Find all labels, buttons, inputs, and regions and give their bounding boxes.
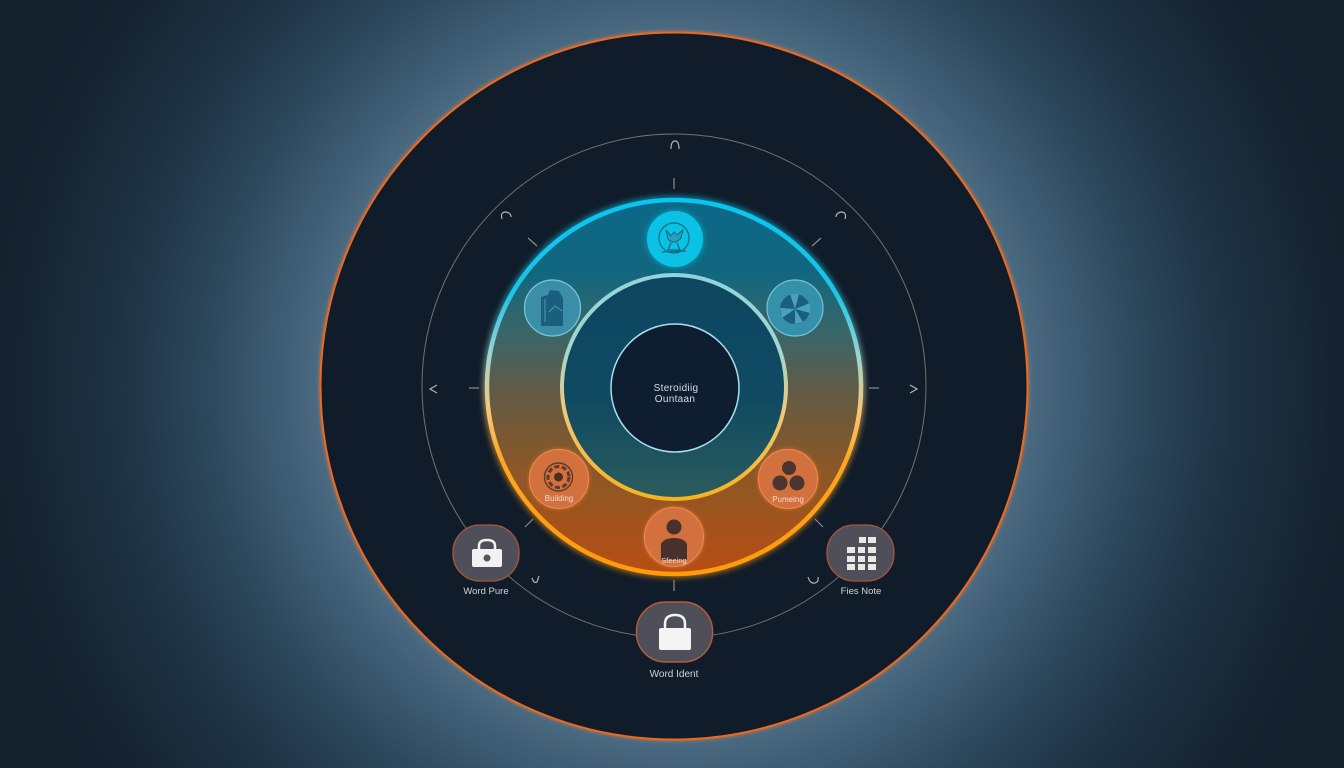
node: top cyan [646, 210, 704, 268]
label: word pure: Word Pure [463, 586, 509, 597]
orbit chevron markers [430, 141, 917, 583]
outer node: word ident lock [636, 602, 712, 662]
tick marks [469, 178, 879, 591]
central core [611, 324, 739, 452]
node: lower left gear icon [528, 448, 590, 510]
label: word ident: Word Ident [650, 669, 699, 680]
thin outer orbit ring [422, 134, 926, 638]
central label: Steroidiig [654, 383, 698, 394]
node: lower right three dots icon [757, 448, 819, 510]
node: upper right fan icon [767, 280, 823, 336]
label: fies note: Fies Note [841, 586, 881, 597]
outer node: fies note grid [827, 525, 894, 581]
node label: Pumeing [772, 495, 804, 504]
main gradient ring [486, 200, 862, 574]
node label: Building [545, 494, 573, 503]
outer node: word pure lock [453, 525, 519, 581]
inner ring [562, 275, 786, 499]
node: upper left document icon [524, 280, 580, 336]
central core: Ountaan [655, 394, 695, 405]
node label: Sfeeing [661, 556, 687, 565]
node: bottom person icon [643, 506, 705, 568]
outer dark disc with orange rim [320, 32, 1028, 740]
